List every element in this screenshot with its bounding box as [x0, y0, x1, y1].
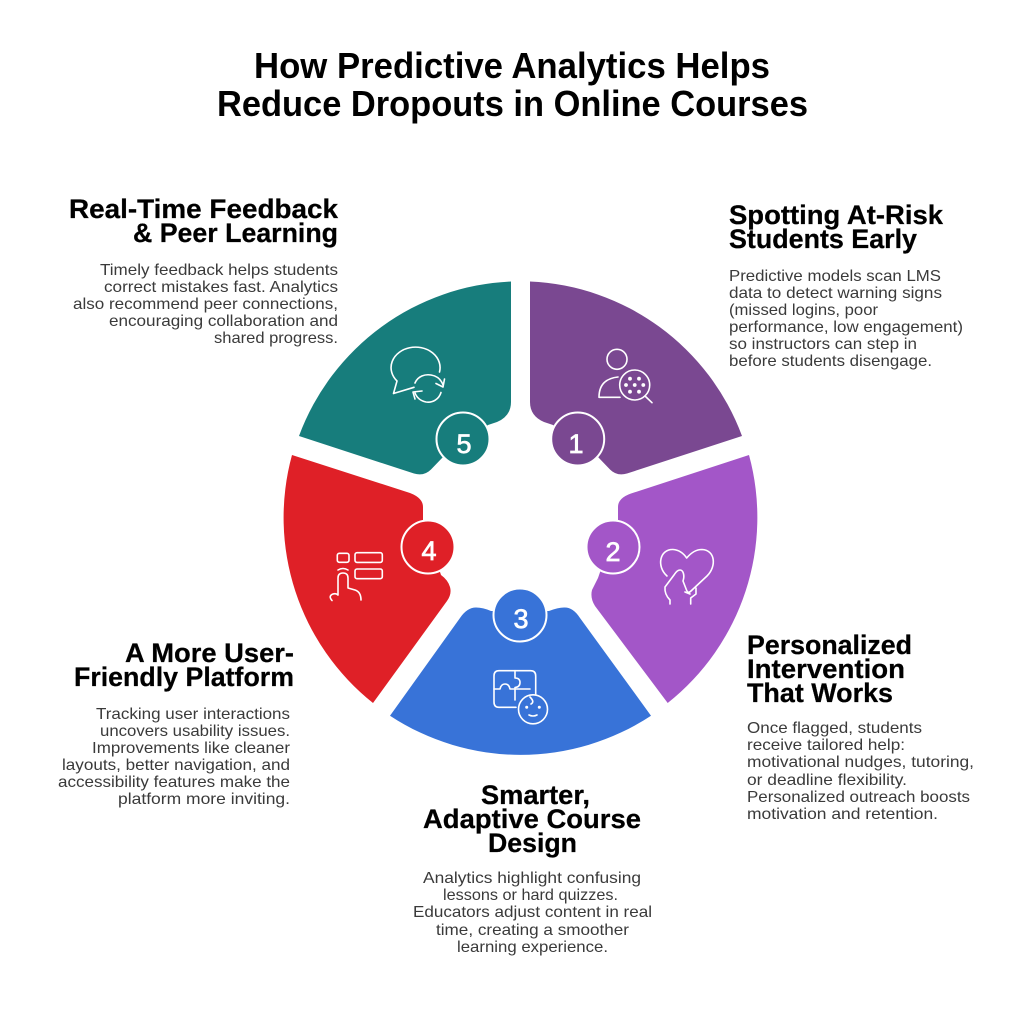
heading [747, 630, 912, 708]
text block: adaptive course design [413, 780, 652, 956]
panel: segment 3 adaptive course design [390, 588, 651, 755]
text block: real-time feedback [69, 194, 338, 347]
text block: personalized intervention [747, 630, 974, 823]
icon: person with magnifier [599, 349, 652, 403]
body text: motivational nudges, tutoring, [747, 754, 974, 771]
heading: Design [488, 828, 577, 858]
body text [58, 706, 291, 808]
body text [73, 262, 338, 347]
title [217, 45, 808, 124]
heading [69, 194, 338, 248]
body text: learning experience. [457, 939, 608, 956]
body text: accessibility features make the [58, 774, 290, 791]
panel: segment 4 user-friendly platform [284, 455, 454, 703]
body text: or deadline flexibility. [747, 772, 907, 789]
body text: uncovers usability issues. [100, 723, 290, 740]
heading: Students Early [729, 224, 917, 254]
text block: user-friendly platform [58, 638, 294, 808]
segment 4 shape [284, 455, 451, 703]
heading: Spotting At-Risk [729, 200, 943, 230]
panel: segment 2 personalized intervention [586, 455, 757, 703]
text block: spotting at-risk students [729, 200, 963, 370]
body text [747, 720, 974, 823]
body text [729, 268, 963, 370]
heading [729, 200, 943, 254]
heading [423, 780, 641, 858]
body text: encouraging collaboration and [109, 313, 338, 330]
heading: Friendly Platform [74, 662, 294, 692]
heading: Smarter, [481, 780, 590, 810]
body text: also recommend peer connections, [73, 296, 338, 313]
number badge 4: 4 [421, 536, 437, 566]
number badge 3 [494, 588, 546, 642]
heading: A More User- [125, 638, 294, 668]
body text: Personalized outreach boosts [747, 789, 970, 806]
segment 3 shape [390, 607, 651, 755]
body text: motivation and retention. [747, 806, 938, 823]
body text: layouts, better navigation, and [62, 757, 290, 774]
body text: (missed logins, poor [729, 302, 879, 319]
body text: platform more inviting. [118, 791, 290, 808]
number badge 5 [436, 412, 490, 466]
segment 5 shape [299, 282, 511, 474]
body text: data to detect warning signs [729, 285, 942, 302]
number badge 1 [551, 412, 604, 466]
panel: segment 5 real-time feedback [299, 282, 511, 474]
body text: so instructors can step in [729, 336, 917, 353]
heading: & Peer Learning [133, 218, 338, 248]
icon: speech bubble with refresh arrows [391, 347, 444, 402]
heading [74, 638, 294, 692]
title: Reduce Dropouts in Online Courses [217, 83, 808, 124]
icon: finger tapping interface [330, 553, 382, 600]
segment 2 shape [591, 455, 757, 703]
body text: lessons or hard quizzes. [443, 887, 618, 904]
number badge 1: 1 [568, 429, 584, 459]
heading: Intervention [747, 654, 905, 684]
title: How Predictive Analytics Helps [254, 45, 770, 86]
body text: Timely feedback helps students [100, 262, 338, 279]
heading: Personalized [747, 630, 912, 660]
number badge 2 [586, 520, 640, 574]
body text: shared progress. [214, 330, 338, 347]
body text: Once flagged, students [747, 720, 922, 737]
segment 1 shape [530, 282, 742, 474]
body text: Tracking user interactions [96, 706, 290, 723]
heading: Adaptive Course [423, 804, 641, 834]
panel: segment 1 spotting at-risk students [530, 282, 742, 474]
number badge 4 [402, 520, 454, 574]
body text: Predictive models scan LMS [729, 268, 941, 285]
body text: before students disengage. [729, 353, 932, 370]
body text: Analytics highlight confusing [423, 870, 641, 887]
number badge 5: 5 [456, 429, 472, 459]
body text: time, creating a smoother [436, 922, 630, 939]
body text [413, 870, 652, 956]
body text: Educators adjust content in real [413, 904, 652, 921]
icon: hand holding heart [661, 549, 713, 604]
icon: puzzle and smiling face [494, 671, 548, 724]
body text: correct mistakes fast. Analytics [104, 279, 338, 296]
body text: performance, low engagement) [729, 319, 963, 336]
body text: receive tailored help: [747, 737, 905, 754]
heading: Real-Time Feedback [69, 194, 338, 224]
body text: Improvements like cleaner [92, 740, 291, 757]
number badge 3: 3 [513, 604, 529, 634]
heading: That Works [747, 678, 893, 708]
number badge 2: 2 [605, 537, 621, 567]
